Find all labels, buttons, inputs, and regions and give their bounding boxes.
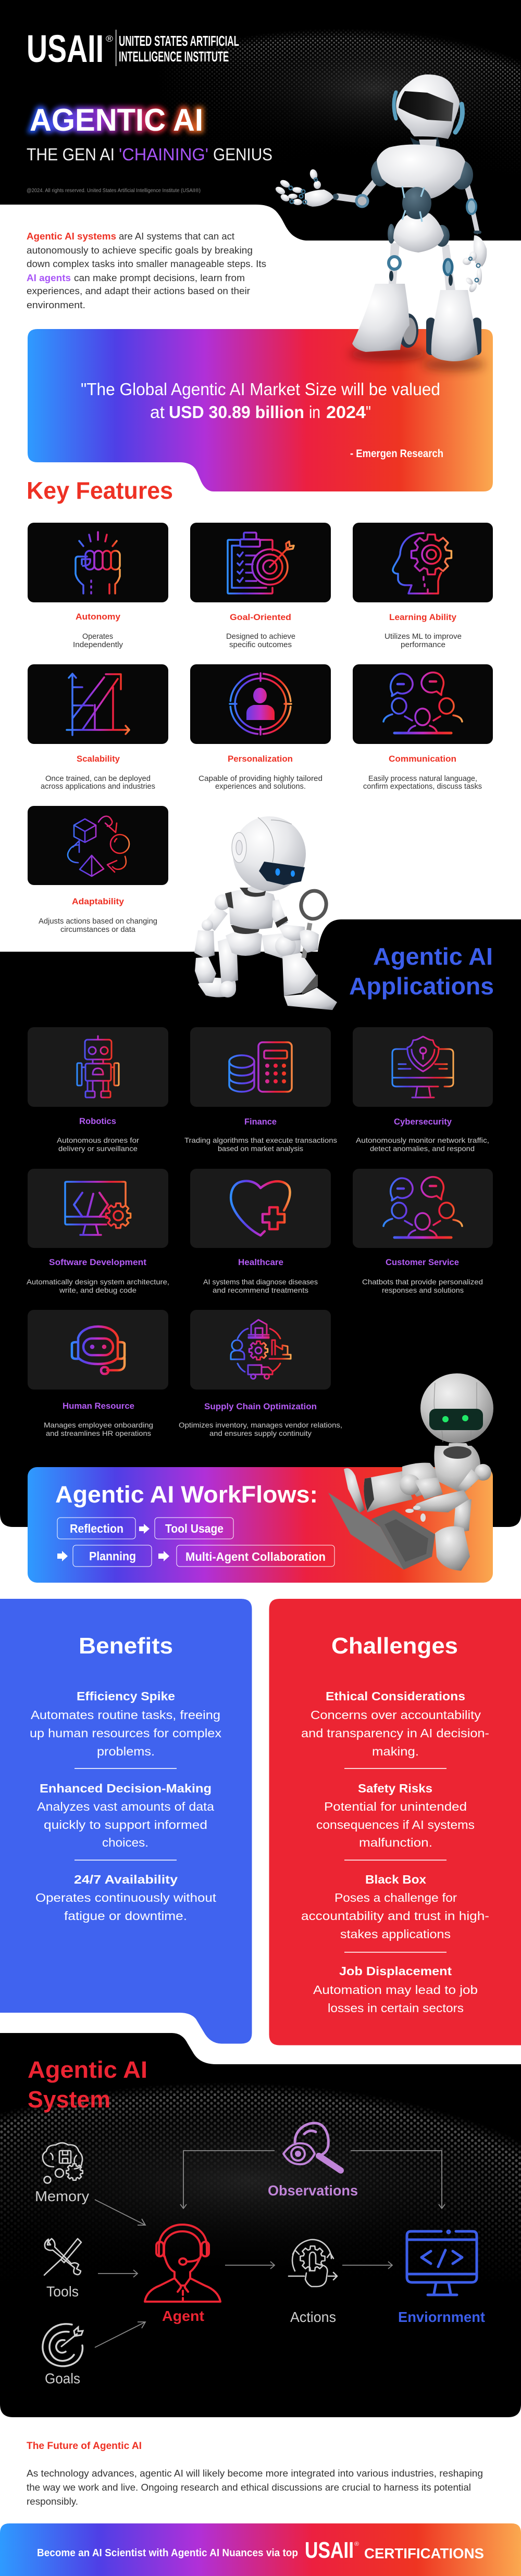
application card: human resource (28, 1310, 168, 1437)
flow step: reflection (57, 1518, 135, 1539)
description (384, 633, 462, 649)
label: observations: Observations (268, 2182, 358, 2199)
benefit: enhanced decision-making: quickly to support informed (44, 1818, 207, 1832)
icon: environment (407, 2231, 477, 2295)
icon: code monitor (65, 1182, 131, 1235)
head (232, 816, 306, 891)
description (184, 1136, 337, 1153)
back leg and foot (198, 938, 238, 997)
paragraph: future: As technology advances, agentic AI will likely become more integrated into various industries, reshaping (27, 2468, 483, 2479)
quote text: in (309, 402, 320, 422)
arrow: actions to environment (342, 2262, 392, 2269)
heading: agentic ai applications: Agentic AI (373, 943, 493, 970)
description: confirm expectations, discuss tasks (363, 782, 482, 791)
feature card: learning ability (353, 523, 493, 649)
label: agent: Agent (162, 2308, 204, 2324)
legs (389, 243, 455, 291)
paragraph: future: the way we work and live. Ongoing research and ethical discussions are crucial to harness its potential (27, 2482, 471, 2493)
title: Healthcare (238, 1257, 283, 1267)
quote text: "The Global Agentic AI Market Size will be valued (81, 380, 440, 399)
icon: tools (44, 2239, 81, 2275)
label: actions: Actions (290, 2309, 336, 2325)
flow step: tool usage: Tool Usage (165, 1522, 224, 1535)
heading: future of agentic ai: The Future of Agentic AI (27, 2441, 142, 2452)
panel: market size quote (28, 329, 493, 491)
title: Customer Service (386, 1257, 459, 1267)
description: Operates (82, 633, 113, 641)
magnifier (299, 889, 329, 958)
left arm (194, 894, 230, 983)
challenge: safety risks: consequences if AI systems (316, 1818, 475, 1832)
title: Personalization (228, 754, 293, 764)
panel: workflows (28, 1467, 493, 1583)
description (199, 775, 322, 791)
title: Robotics (79, 1116, 116, 1126)
title: Learning Ability (389, 612, 457, 622)
benefit: availability (35, 1873, 217, 1923)
benefit: efficiency spike: up human resources for complex (30, 1726, 222, 1740)
subtitle: GENIUS (213, 145, 272, 164)
laptop (328, 1493, 435, 1570)
logo: USAII (27, 27, 239, 70)
flow step: tool usage (155, 1518, 233, 1539)
description: detect anomalies, and respond (370, 1144, 475, 1153)
panel: benefits (0, 1599, 252, 2044)
arrow: observations to agent (180, 2151, 275, 2208)
logo: USAII: UNITED STATES ARTIFICIAL (119, 33, 239, 49)
intro text: down complex tasks into smaller manageable steps. Its (27, 258, 266, 269)
description: AI systems that diagnose diseases (203, 1278, 318, 1286)
benefit: efficiency spike (30, 1689, 222, 1758)
icon: agent (145, 2225, 220, 2302)
icon: heart with cross (231, 1181, 290, 1235)
description: across applications and industries (41, 782, 155, 791)
description (41, 775, 155, 791)
benefit: enhanced decision-making: Enhanced Decision-Making (40, 1782, 212, 1795)
challenge: ethical considerations: making. (372, 1745, 419, 1758)
description (57, 1136, 139, 1153)
title: Scalability (77, 754, 120, 764)
benefit: efficiency spike: problems. (97, 1745, 155, 1758)
description (203, 1278, 318, 1294)
description: and streamlines HR operations (46, 1429, 151, 1437)
benefit: enhanced decision-making: choices. (102, 1836, 148, 1849)
description: Easily process natural language, (368, 775, 477, 783)
challenge: ethical considerations: and transparency in AI decision- (301, 1726, 489, 1740)
challenge: ethical considerations (301, 1689, 489, 1758)
application card: customer service (353, 1169, 493, 1294)
feature card: adaptability (28, 806, 168, 934)
description: performance (401, 641, 445, 649)
call to action: Become an AI Scientist with Agentic AI Nuances via top (37, 2547, 298, 2559)
icon: monitor shield (392, 1037, 453, 1097)
intro text: can make prompt decisions, learn from (74, 272, 245, 283)
flow step: multi-agent collaboration (177, 1545, 334, 1567)
arrow: agent to actions (225, 2262, 275, 2269)
challenge: job displacement: Automation may lead to job (313, 1983, 478, 1997)
label: memory: Memory (35, 2188, 89, 2204)
challenge: safety risks (316, 1782, 475, 1849)
application card: healthcare (190, 1169, 331, 1294)
footer banner (0, 2523, 521, 2576)
icon: clipboard and target (228, 533, 294, 594)
description: responses and solutions (382, 1286, 464, 1294)
feature card: autonomy (28, 523, 168, 649)
description (27, 1278, 169, 1294)
arrow (158, 1551, 169, 1561)
description: based on market analysis (218, 1144, 303, 1153)
heading: key features: Key Features (27, 477, 173, 504)
robot: kneeling with magnifier (194, 816, 337, 1010)
challenge: ethical considerations: Ethical Considerations (326, 1689, 465, 1703)
arrow: goals to agent (95, 2322, 145, 2347)
challenge: safety risks: Potential for unintended (324, 1800, 467, 1813)
challenge: safety risks: Safety Risks (358, 1782, 432, 1795)
intro text: autonomously to achieve specific goals by breaking (27, 245, 253, 256)
body (371, 137, 473, 252)
challenge: ethical considerations: Concerns over accountability (311, 1708, 481, 1722)
title: Finance (244, 1117, 277, 1127)
challenge: safety risks: malfunction. (359, 1836, 432, 1849)
challenge: black box (301, 1873, 489, 1941)
title: Software Development (49, 1257, 146, 1267)
application card: robotics (28, 1027, 168, 1153)
quote text: at (150, 402, 165, 422)
paragraph: future: responsibly. (27, 2496, 78, 2507)
left arm and hand (274, 169, 376, 207)
feature card: goal-oriented (190, 523, 331, 649)
benefit: availability: 24/7 Availability (74, 1873, 178, 1886)
label: goals: Goals (45, 2370, 80, 2386)
feature card: scalability (28, 664, 168, 791)
logo and certifications (305, 2537, 484, 2563)
feature card: personalization (190, 664, 331, 791)
description: Designed to achieve (226, 633, 295, 641)
icon: growth chart (67, 674, 129, 735)
torso (225, 886, 276, 956)
quote text (81, 380, 440, 422)
logo: USAII: ® (106, 34, 114, 44)
description (363, 775, 482, 791)
application card: software development (27, 1169, 169, 1294)
front leg and foot (262, 933, 337, 1010)
intro text: AI agents (27, 272, 71, 283)
icon: target person (230, 673, 291, 735)
feet (352, 284, 481, 361)
description: circumstances or data (60, 926, 136, 934)
intro text: environment. (27, 299, 85, 310)
application card: cybersecurity (353, 1027, 493, 1153)
description: write, and debug code (59, 1286, 137, 1294)
logo: USAII: INTELLIGENCE INSTITUTE (119, 48, 229, 65)
legs (344, 1468, 472, 1571)
description (39, 917, 157, 934)
description (226, 633, 295, 649)
description: Automatically design system architecture, (27, 1278, 169, 1286)
benefit: availability: Operates continuously without (35, 1891, 217, 1904)
icon: fist (76, 532, 120, 594)
challenge: black box: Poses a challenge for (334, 1891, 457, 1904)
copyright: @2024. All rights reserved. United States Artificial Intelligence Institute (USAII®) (27, 187, 201, 194)
challenge: black box: stakes applications (340, 1927, 451, 1941)
title: Communication (389, 754, 456, 764)
icon: people talking (383, 673, 462, 733)
icon: actions (289, 2240, 337, 2287)
description (179, 1421, 342, 1437)
panel: hero (0, 0, 521, 241)
label: tools: Tools (46, 2283, 79, 2300)
head (420, 1373, 493, 1459)
heading: Agentic AI (28, 2056, 147, 2083)
arrow: tools to agent (98, 2270, 138, 2277)
flow step: reflection: Reflection (70, 1522, 123, 1535)
description: Adjusts actions based on changing (39, 917, 157, 926)
icon: goals target (43, 2324, 83, 2366)
description: Independently (73, 641, 123, 649)
heading: Benefits (79, 1633, 173, 1659)
quote text: 2024 (326, 402, 366, 422)
logo and certifications: CERTIFICATIONS (364, 2545, 484, 2561)
quote source: - Emergen Research (350, 448, 443, 460)
heading: System (28, 2086, 110, 2113)
description (362, 1278, 483, 1294)
benefit: enhanced decision-making: Analyzes vast amounts of data (37, 1800, 214, 1813)
icon: head with gear (393, 533, 451, 594)
subtitle: THE GEN AI (27, 145, 115, 164)
icon: robot (77, 1036, 119, 1097)
icon: shapes cycle (68, 816, 129, 876)
description: Optimizes inventory, manages vendor relations, (179, 1421, 342, 1429)
challenge: black box: Black Box (365, 1873, 426, 1886)
arrow (139, 1524, 150, 1534)
heading: agentic ai applications (349, 943, 494, 1000)
intro text: experiences, and adapt their actions based on their (27, 285, 250, 296)
panel: applications (0, 919, 521, 1527)
icon: people talking (383, 1177, 462, 1238)
title: Goal-Oriented (230, 612, 291, 622)
icon: observations (283, 2123, 341, 2170)
label: environment: Enviornment (398, 2309, 485, 2325)
arrow (57, 1551, 68, 1561)
head (394, 74, 463, 139)
description (73, 633, 123, 649)
flow step: planning (73, 1545, 152, 1567)
application card: finance (184, 1027, 337, 1153)
description (356, 1136, 489, 1153)
logo and certifications: ® (354, 2541, 359, 2547)
challenge: job displacement (313, 1964, 478, 2015)
benefit: efficiency spike: Efficiency Spike (77, 1689, 175, 1703)
icon: supply chain (231, 1320, 291, 1379)
intro text: are AI systems that can act (119, 231, 234, 242)
heading: Challenges (331, 1633, 458, 1659)
quote text: " (366, 402, 371, 422)
benefit: efficiency spike: Automates routine tasks, freeing (31, 1708, 220, 1722)
flow step: multi-agent collaboration: Multi-Agent Collaboration (185, 1550, 326, 1563)
description: Autonomous drones for (57, 1136, 139, 1144)
logo and certifications: USAII (305, 2537, 354, 2563)
title: Supply Chain Optimization (204, 1401, 317, 1411)
subtitle: 'CHAINING' (119, 145, 208, 164)
right arm and hand (463, 186, 487, 294)
application card: supply chain (179, 1310, 342, 1437)
right arm and hand (272, 900, 319, 953)
description: Chatbots that provide personalized (362, 1278, 483, 1286)
description: Once trained, can be deployed (45, 775, 151, 783)
subtitle (27, 145, 272, 164)
arrow: memory to agent (95, 2200, 145, 2225)
description: specific outcomes (229, 641, 292, 649)
description: experiences and solutions. (215, 782, 306, 791)
benefit: availability: fatigue or downtime. (64, 1909, 187, 1923)
description: Manages employee onboarding (44, 1421, 153, 1429)
panel: agentic ai system (0, 2033, 521, 2417)
paragraph: future (27, 2468, 483, 2507)
title: Cybersecurity (394, 1117, 452, 1127)
heading: Agentic AI WorkFlows: (55, 1481, 318, 1508)
icon: coins and calculator (229, 1042, 292, 1092)
description: Autonomously monitor network traffic, (356, 1136, 489, 1144)
icon: memory brain (43, 2143, 83, 2183)
quote text: USD 30.89 billion (169, 402, 304, 422)
title: Human Resource (63, 1401, 134, 1411)
title: AGENTIC AI (30, 103, 203, 137)
logo: USAII: USAII (27, 27, 104, 70)
heading (28, 2056, 147, 2113)
arrow: observations to environment (351, 2151, 445, 2208)
benefit: enhanced decision-making (37, 1782, 214, 1849)
description: delivery or surveillance (58, 1144, 138, 1153)
challenge: black box: accountability and trust in high- (301, 1909, 489, 1923)
feature card: communication (353, 664, 493, 791)
heading: agentic ai applications: Applications (349, 973, 494, 1000)
challenge: job displacement: Job Displacement (339, 1964, 452, 1978)
challenge: job displacement: losses in certain sectors (328, 2001, 464, 2015)
panel: challenges (269, 1599, 521, 2045)
description: Trading algorithms that execute transactions (184, 1136, 337, 1144)
robot: standing (274, 74, 487, 371)
description: and recommend treatments (213, 1286, 308, 1294)
title: AGENTIC AI (30, 103, 203, 137)
intro text: Agentic AI systems (27, 231, 116, 242)
description (44, 1421, 153, 1437)
robot: seated with laptop (328, 1373, 493, 1571)
description: Utilizes ML to improve (384, 633, 462, 641)
title: Adaptability (72, 896, 125, 906)
icon: robot headset (72, 1327, 125, 1374)
description: Capable of providing highly tailored (199, 775, 322, 783)
title: Autonomy (76, 612, 121, 622)
intro text (27, 231, 266, 310)
arms and torso (400, 1446, 491, 1512)
flow step: planning: Planning (89, 1549, 136, 1563)
description: and ensures supply continuity (209, 1429, 312, 1437)
